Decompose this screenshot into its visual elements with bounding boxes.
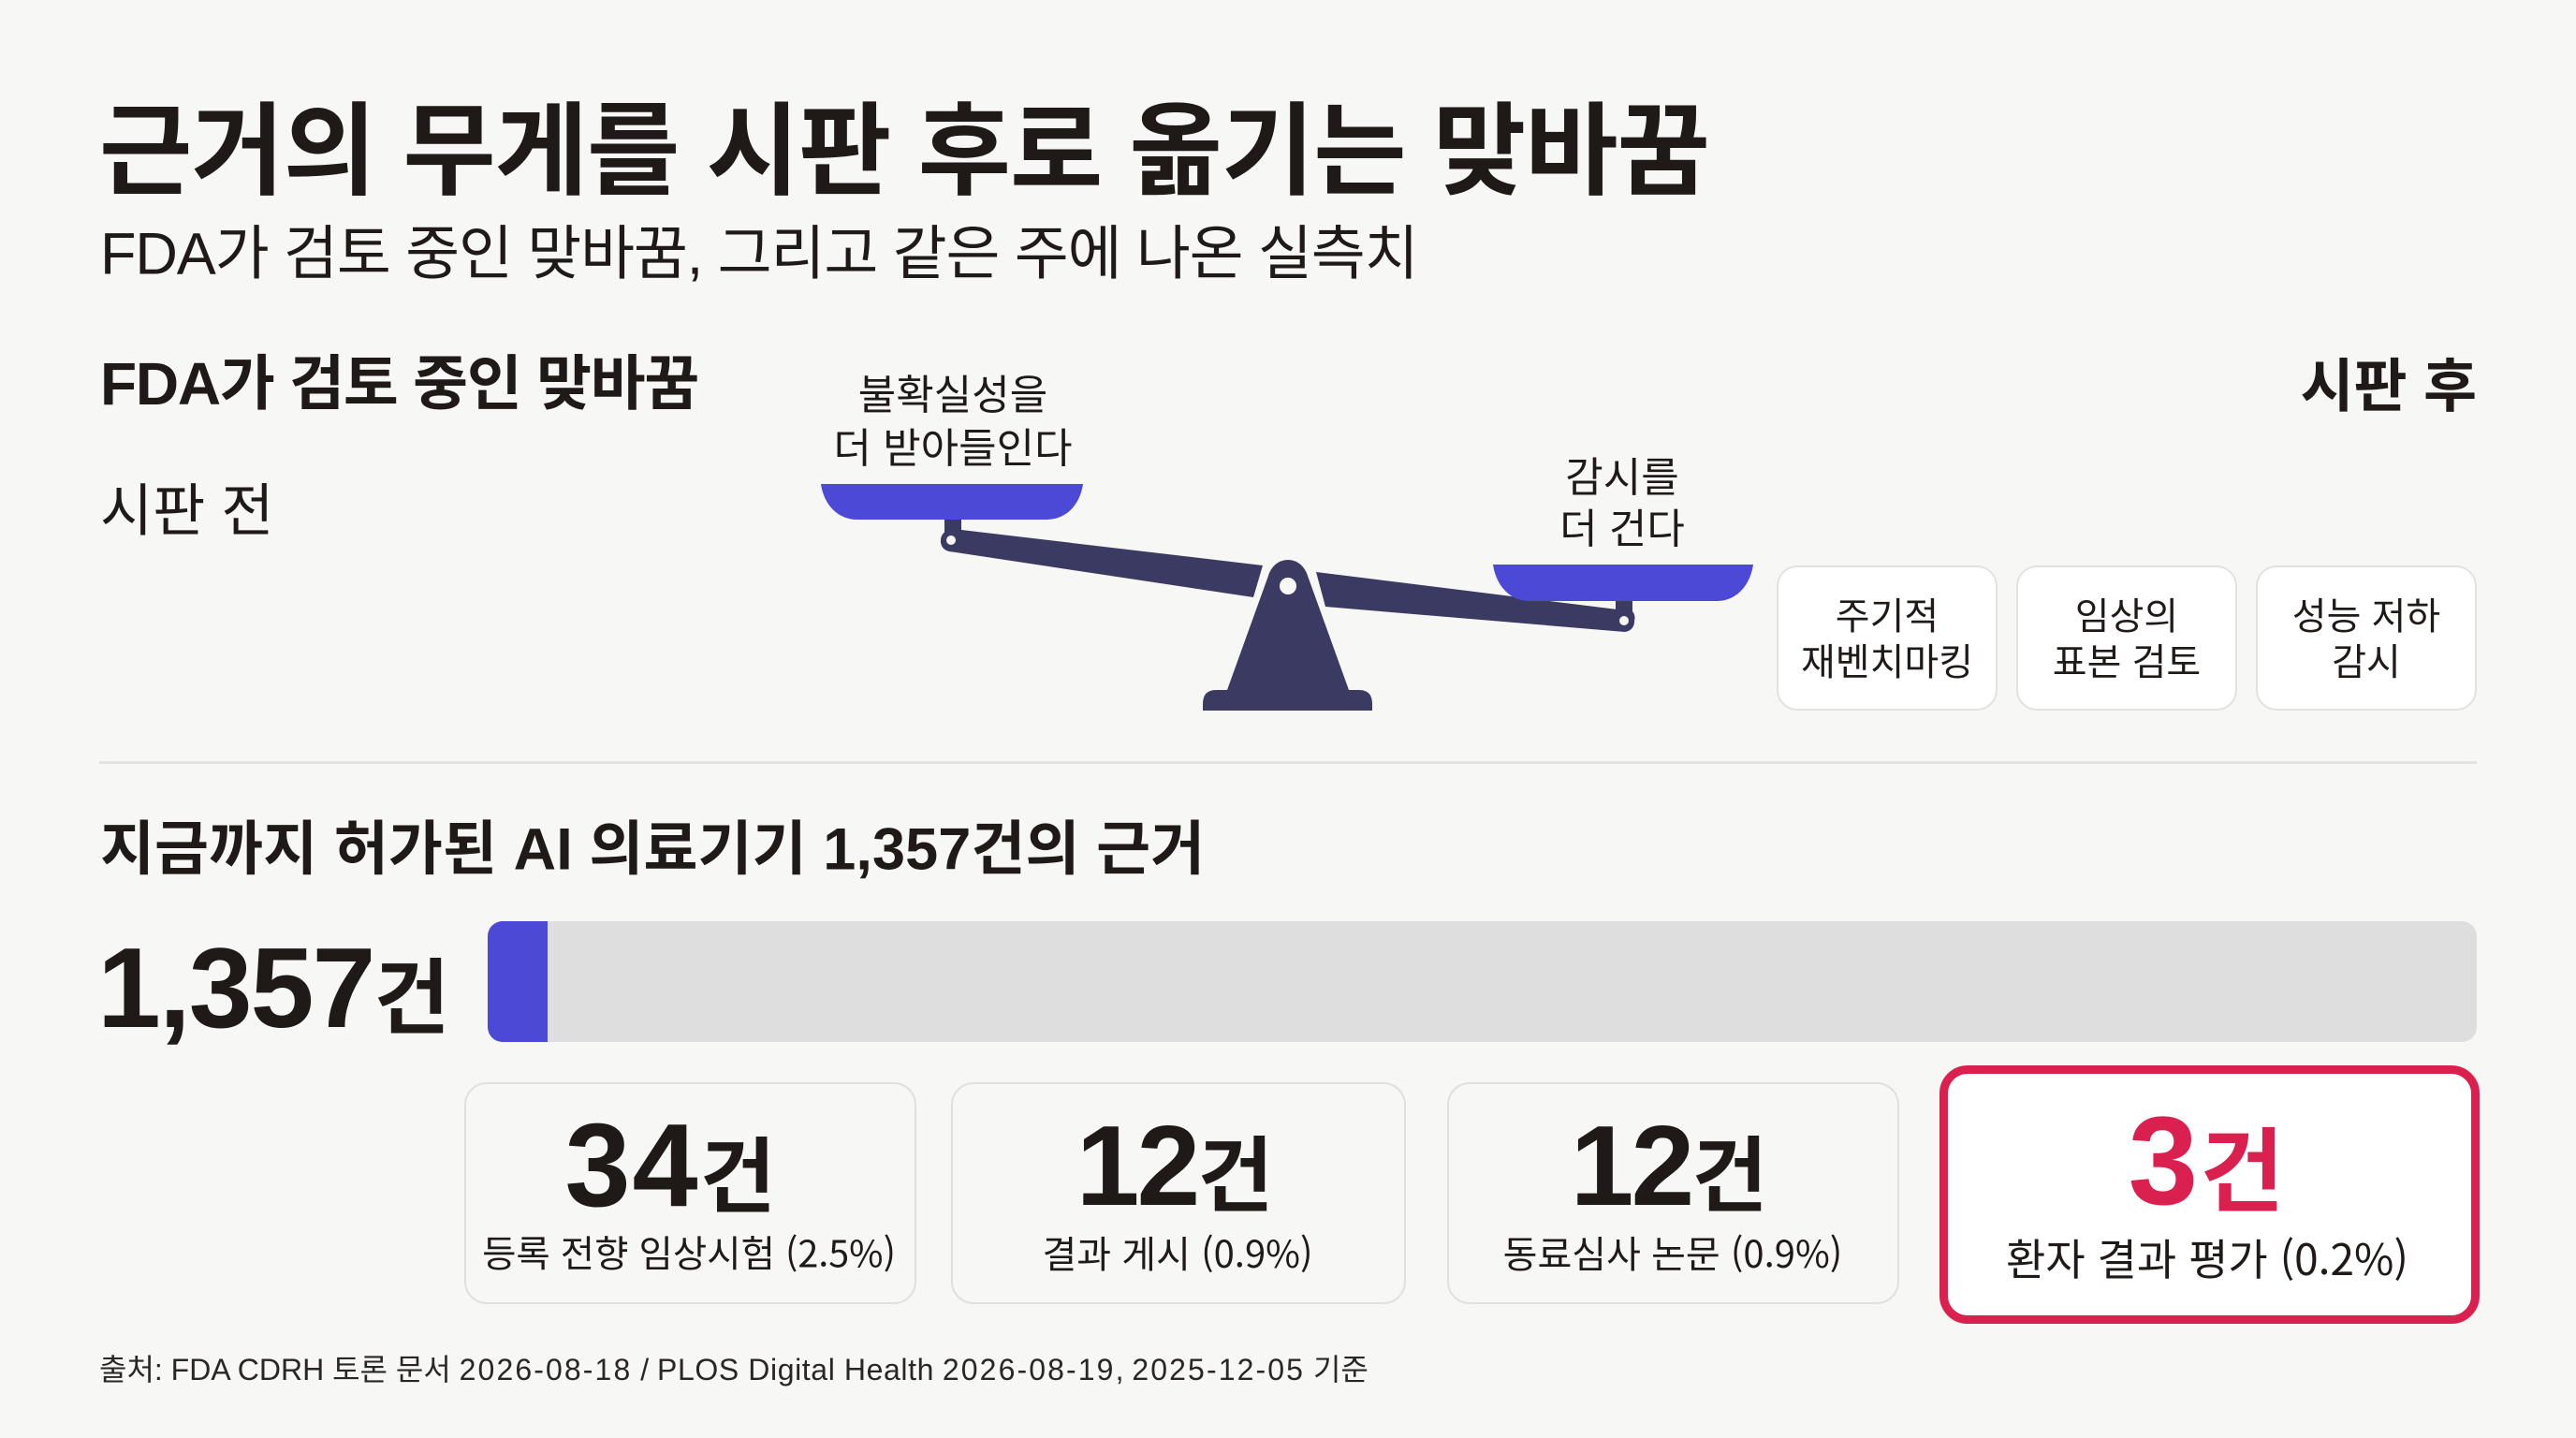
label: pre-market: 시판 전 [100,464,273,547]
beam pivot holes [946,536,1629,625]
chip: performance drift monitoring: 성능 저하 [2292,586,2440,640]
value: 34: 34건 [564,1099,776,1231]
chip: periodic rebenchmarking: 재벤치마킹 [1801,632,1973,686]
right pan [1493,565,1753,601]
chip: clinical sample review: 표본 검토 [2053,632,2201,686]
chip: performance drift monitoring [2256,565,2477,711]
right pan label: 감시를 [1565,444,1679,504]
value: 12 results: 12건 [1076,1102,1273,1229]
chip: clinical sample review [2016,565,2237,711]
chip: periodic rebenchmarking [1777,565,1998,711]
section heading: 지금까지 허가된 AI 의료기기 1,357건의 근거 [100,816,1205,882]
bar fill: 2.5% share [488,921,548,1042]
right pan label [1559,444,1685,555]
source footnote: 출처: FDA CDRH 토론 문서 2026-08-18 / PLOS Digital Health 2026-08-19, 2025-12-05 기준 [99,1353,1368,1387]
total count: 1,357건 [97,924,449,1051]
beam and posts [941,515,1634,632]
left pan label: 더 받아들인다 [833,415,1073,475]
subtitle: FDA가 검토 중인 맞바꿈, 그리고 같은 주에 나온 실측치 [100,221,1418,286]
divider [99,761,2477,764]
label: results posted: 결과 게시 (0.9%) [1042,1225,1313,1279]
label: patient outcome evaluation: 환자 결과 평가 (0.2%) [2006,1226,2408,1288]
value: 12 papers: 12건 [1571,1102,1767,1229]
label: registered prospective trials: 등록 전향 임상시험 (2.5%) [482,1225,896,1278]
title: 근거의 무게를 시판 후로 옮기는 맞바꿈 [99,70,1709,216]
card: results posted [951,1082,1406,1304]
card: peer reviewed papers [1447,1082,1899,1304]
chip: periodic rebenchmarking: 주기적 [1836,586,1939,640]
card: registered prospective trials [464,1082,916,1304]
balance scale illustration [821,365,1753,711]
chip: performance drift monitoring: 감시 [2332,632,2401,686]
value: 3: 3건 [2129,1092,2284,1231]
label: post-market: 시판 후 [2301,339,2477,423]
fulcrum pivot hole [1280,578,1296,594]
label: peer reviewed papers: 동료심사 논문 (0.9%) [1503,1225,1842,1279]
left pan [821,484,1083,520]
heading: tradeoff under FDA review: FDA가 검토 중인 맞바꿈 [100,350,698,418]
chip: clinical sample review: 임상의 [2075,586,2178,640]
fulcrum [1203,560,1372,711]
right pan label: 더 건다 [1559,495,1685,555]
progress bar [488,921,2477,1042]
card: patient outcome evaluation (highlight) [1939,1065,2480,1324]
left pan label [833,361,1073,475]
